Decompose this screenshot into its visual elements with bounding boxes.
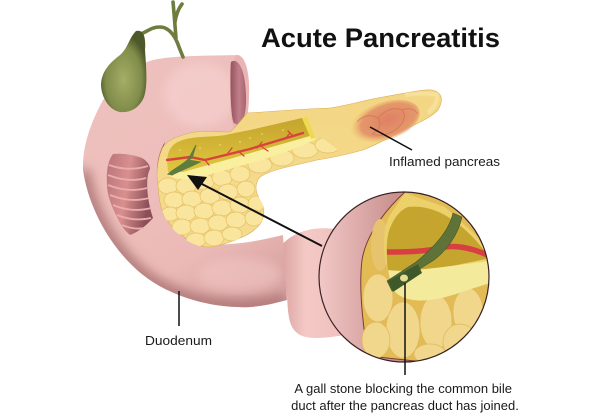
lens vein	[387, 246, 492, 257]
gallbladder	[101, 2, 183, 112]
dark slot beside pancreas	[157, 142, 165, 172]
pancreas	[157, 90, 441, 247]
lens pale cut face	[388, 260, 495, 300]
pancreatic duct vein	[167, 131, 303, 165]
cavity flecks	[179, 129, 284, 151]
caption: gall stone: duct after the pancreas duct has joined.	[291, 398, 519, 413]
bile ducts	[138, 2, 183, 57]
pancreas outline	[157, 90, 441, 247]
magnified lens	[319, 190, 500, 375]
caption: gall stone: A gall stone blocking the common bile	[294, 381, 512, 396]
label: inflamed pancreas: Inflamed pancreas	[389, 155, 500, 169]
lens cavity rim	[384, 193, 490, 272]
lens duct cavity	[386, 206, 486, 272]
side window showing folds	[107, 142, 165, 235]
lens green bile duct	[387, 213, 462, 291]
inflamed area	[345, 92, 425, 150]
duodenum	[83, 55, 345, 338]
label: duodenum	[145, 291, 212, 348]
duodenum body	[83, 55, 287, 307]
top opening of duodenum	[230, 55, 249, 133]
duodenum shading	[83, 63, 287, 307]
gall stone	[400, 274, 408, 282]
pale lower cut face	[167, 134, 316, 179]
duodenum lower stub	[280, 228, 345, 338]
tail highlight	[405, 94, 437, 113]
label: duodenum: Duodenum	[145, 334, 212, 348]
title: Acute Pancreatitis	[261, 23, 500, 53]
duct cavity	[167, 118, 310, 172]
lens pancreas tissue	[360, 192, 488, 361]
gallbladder sac	[101, 31, 146, 112]
lobules of pancreas	[158, 137, 341, 247]
green common bile duct	[168, 145, 200, 175]
arrow to gall stone site	[187, 175, 322, 246]
label: inflamed pancreas	[370, 127, 500, 169]
leader to gall stone	[404, 283, 406, 375]
